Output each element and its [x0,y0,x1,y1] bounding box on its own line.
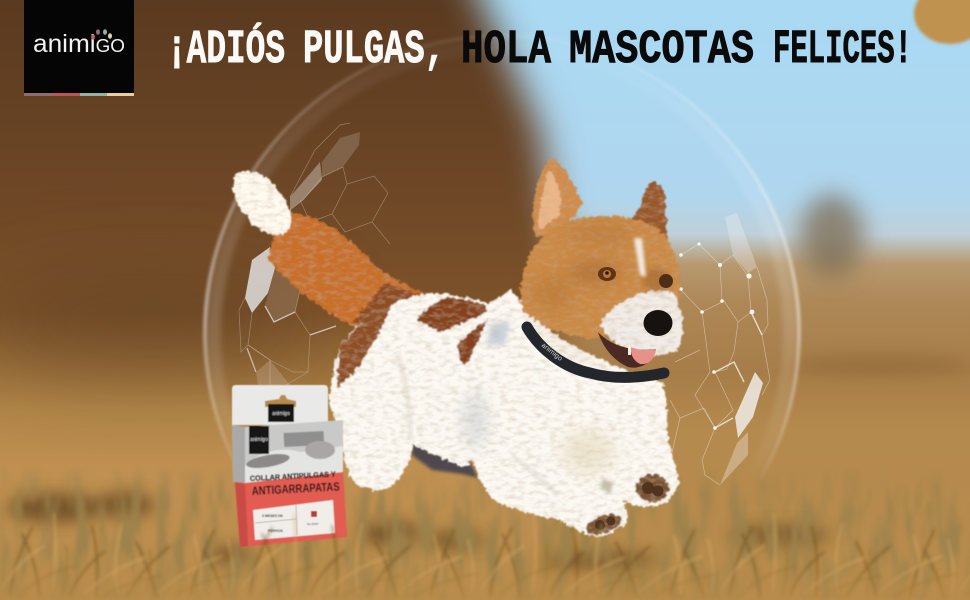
hexagon shield mesh: right [668,213,770,485]
dog shading [398,226,669,495]
hexagon shield mesh: left [239,123,390,385]
title: PULGAS, [303,24,445,77]
dog collar: animigo [540,342,563,363]
title: MASCOTAS [569,24,754,77]
box title: ANTIGARRAPATAS [251,479,340,498]
box red panel [235,472,347,547]
box info label: Sin DDVP [307,523,319,526]
dog tail [221,160,432,345]
box grey panel: animigo [250,437,268,443]
logo paw [91,29,112,40]
nose [644,310,672,336]
box info label: 3 MESES DE [262,514,284,518]
protective bubble [205,36,799,480]
title [167,23,912,77]
box grey panel [232,420,343,483]
dog [221,158,683,538]
dog head [521,158,683,370]
box hanger: animigo [272,411,290,417]
grass texture [0,465,970,600]
box title: COLLAR ANTIPULGAS Y [250,470,336,483]
box info label: PERROS [268,529,283,533]
dog body [329,290,680,538]
title: ¡ADIÓS [167,23,285,77]
title: HOLA [461,24,552,77]
box info label [253,500,335,540]
logo badge [24,0,134,96]
product box [232,385,347,547]
paw pads [595,482,664,530]
logo wordmark: animiGO [33,30,125,58]
box title [250,470,340,498]
box hanger [232,385,328,425]
dog fur silhouette [221,158,683,538]
foreground grass blades [10,512,954,594]
dark grass clumps [7,493,830,567]
mouth and tongue [598,332,656,368]
dog shadow under belly [412,440,478,478]
eyes [598,267,673,288]
dog collar [527,327,664,378]
